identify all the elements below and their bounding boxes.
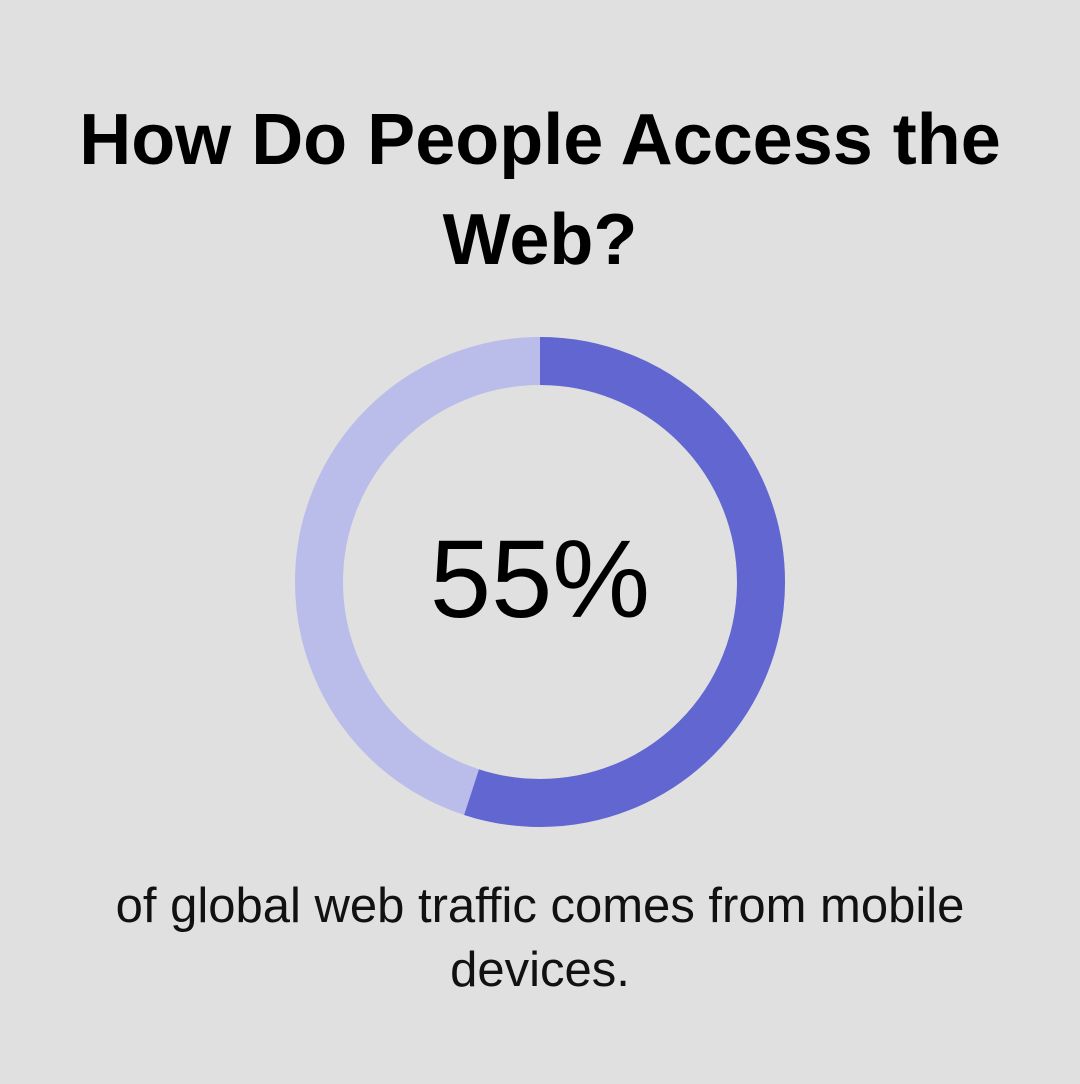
ring: 55% mobile share [319, 361, 761, 803]
caption: devices. [450, 943, 630, 997]
caption [116, 879, 964, 997]
ring: remaining share [319, 361, 761, 803]
title [79, 100, 1001, 280]
title: Web? [443, 200, 637, 280]
donut chart [295, 337, 785, 827]
center value: 55% [430, 518, 650, 641]
caption: of global web traffic comes from mobile [116, 879, 964, 933]
title: How Do People Access the [79, 100, 1001, 180]
